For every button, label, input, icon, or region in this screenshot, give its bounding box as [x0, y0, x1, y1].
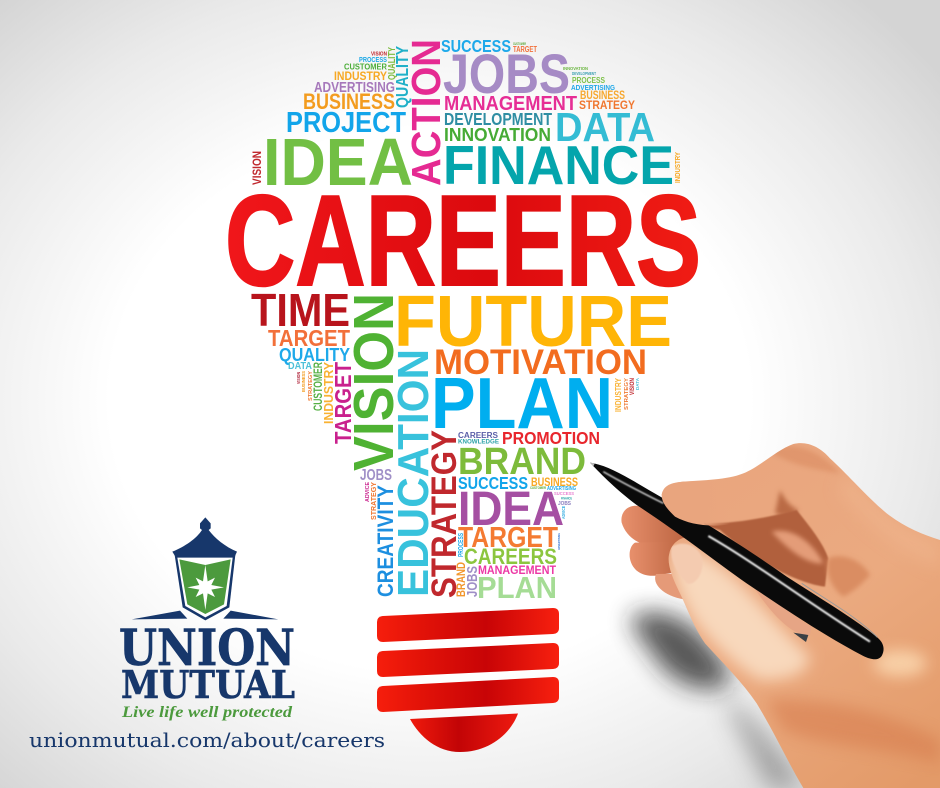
words: lower bulb cluster: STRATEGY — [369, 482, 378, 520]
words: lower bulb cluster: BRAND — [455, 562, 468, 597]
words: top right cluster: ADVERTISING — [571, 83, 615, 92]
words: lower bulb cluster: PLAN — [477, 571, 557, 605]
word: STRATEGY vertical: STRATEGY — [425, 430, 464, 598]
words: right tiny cluster: VISION — [629, 378, 636, 395]
words: top left cluster: ADVERTISING — [314, 80, 395, 96]
logo wordmark: UNION: UNION — [119, 619, 295, 677]
words: lower bulb cluster: ADVICE — [365, 482, 371, 502]
words: lower bulb cluster — [360, 428, 600, 605]
words: top left cluster — [286, 46, 412, 139]
title: CAREERS: CAREERS — [225, 169, 701, 313]
words: lower bulb cluster: JOBS — [558, 501, 571, 507]
words: top right cluster: BUSINESS — [580, 89, 625, 102]
words: top left cluster: QUALITY — [392, 46, 412, 108]
word: VISION big vertical: VISION — [343, 293, 406, 471]
words: top right cluster: DATA — [555, 104, 655, 150]
words: lower bulb cluster: CUSTOMER — [530, 486, 546, 490]
words: lower bulb cluster: JOBS — [360, 467, 392, 484]
words: lower bulb cluster: SUCCESS — [554, 491, 574, 496]
words: lower bulb cluster: JOBS — [465, 566, 481, 597]
words: lower bulb cluster: CREATIVITY — [373, 485, 398, 597]
word: INDUSTRY vertical: INDUSTRY — [673, 152, 682, 183]
words: top right cluster: SUCCESS — [441, 36, 511, 56]
thread 1 — [377, 608, 559, 642]
words: lower bulb cluster: PROMOTION — [502, 428, 600, 448]
website url: unionmutual.com/about/careers — [29, 728, 385, 752]
words: right tiny cluster — [613, 377, 640, 412]
pen — [590, 462, 884, 659]
word: FINANCE: FINANCE — [443, 134, 674, 196]
words: middle left cluster: BUSINESS — [301, 371, 306, 392]
word: PLAN: PLAN — [431, 363, 613, 444]
words: top right cluster: INNOVATION — [563, 66, 588, 71]
thread 2 — [377, 643, 559, 677]
words: right tiny cluster: STRATEGY — [624, 378, 630, 410]
words: middle left cluster — [251, 284, 356, 444]
bulb base: screw threads — [377, 608, 559, 752]
words: lower bulb cluster: ADVICE — [561, 506, 566, 519]
words: middle left cluster: VISION — [296, 372, 301, 384]
palm and thumb — [662, 443, 940, 788]
words: top left cluster: BUSINESS — [303, 89, 395, 114]
words: top left cluster: PROJECT — [286, 107, 406, 139]
word: IDEA: IDEA — [263, 125, 413, 200]
words: middle left cluster: CUSTOMER — [312, 362, 325, 411]
logo: Union Mutual — [119, 517, 295, 721]
index fingertip over pen — [662, 480, 730, 526]
words: lower bulb cluster: FINANCE — [561, 496, 572, 500]
hand holding pen — [590, 443, 940, 788]
words: lower bulb cluster: KNOWLEDGE — [458, 438, 500, 446]
words: lower bulb cluster: TARGET — [458, 522, 558, 554]
words: top left cluster: CUSTOMER — [344, 62, 387, 72]
bulb tip — [410, 714, 518, 752]
gap behind thumb — [793, 633, 808, 642]
words: top right cluster: DEVELOPMENT — [572, 71, 596, 76]
words: lower bulb cluster: ADVERTISING — [547, 486, 576, 492]
words: top right cluster: MANAGEMENT — [444, 93, 578, 115]
words: top left cluster: VISION — [371, 52, 387, 58]
words: lower bulb cluster: MANAGEMENT — [478, 564, 556, 577]
words: top right cluster: INNOVATION — [444, 125, 551, 146]
words: lower bulb cluster: ADVERTISING — [557, 532, 561, 550]
words: lower bulb cluster: SUCCESS — [458, 473, 528, 493]
words: lower bulb cluster: PROCESS — [456, 533, 465, 557]
words: top right cluster: JOBS — [443, 42, 570, 105]
words: middle left cluster: DATA — [288, 361, 313, 372]
thread 3 — [377, 677, 559, 712]
word cloud lightbulb — [225, 36, 701, 605]
skin shading — [671, 446, 940, 763]
words: top right cluster: DEVELOPMENT — [444, 109, 552, 129]
words: right tiny cluster: DATA — [635, 377, 640, 390]
words: lower bulb cluster: CAREERS — [458, 430, 498, 440]
words: top right cluster: STRATEGY — [579, 99, 635, 112]
word: VISION vertical: VISION — [251, 151, 264, 185]
words: middle left cluster: TARGET — [330, 362, 356, 444]
back fingers — [621, 506, 690, 599]
words: lower bulb cluster: BRAND — [458, 441, 586, 483]
words: top left cluster: INDUSTRY — [334, 70, 387, 83]
words: middle left cluster: INDUSTRY — [321, 362, 336, 424]
hand shadow — [630, 612, 803, 788]
words: top left cluster: PROCESS — [359, 55, 387, 64]
words: top right cluster: TARGET — [513, 44, 537, 54]
word: ACTION vertical: ACTION — [403, 39, 449, 186]
words: top right cluster: CUSTOMER — [513, 42, 526, 46]
logo icon: lantern — [132, 517, 278, 620]
words: middle left cluster: TARGET — [268, 325, 350, 351]
word: EDUCATION vertical: EDUCATION — [389, 349, 438, 597]
words: lower bulb cluster: IDEA — [458, 483, 564, 536]
words: top right cluster — [441, 36, 655, 150]
words: top left cluster: QUALITY — [387, 47, 398, 80]
word: MOTIVATION: MOTIVATION — [434, 343, 647, 382]
words: middle left cluster: TIME — [251, 284, 350, 336]
words: right tiny cluster: INDUSTRY — [613, 378, 623, 412]
words: middle left cluster: QUALITY — [279, 345, 350, 366]
words: lower bulb cluster: BUSINESS — [531, 476, 578, 489]
words: top right cluster: PROCESS — [572, 75, 605, 85]
word: FUTURE: FUTURE — [394, 281, 672, 362]
words: lower bulb cluster: CAREERS — [464, 544, 557, 569]
logo wordmark: MUTUAL: MUTUAL — [121, 663, 295, 708]
words: middle left cluster: STRATEGY — [308, 371, 314, 401]
logo tagline: Live life well protected — [121, 704, 292, 721]
